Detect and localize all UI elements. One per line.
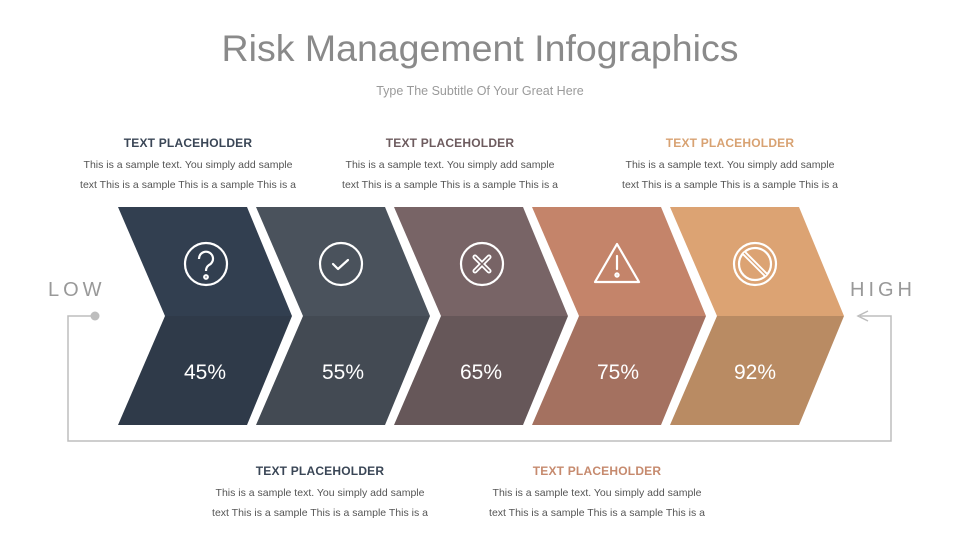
text block 3 bbox=[622, 136, 838, 191]
label high: HIGH bbox=[850, 279, 916, 301]
text block 5 bbox=[489, 464, 705, 519]
text block 2 bbox=[342, 136, 558, 191]
chevron 4: 75% bbox=[597, 361, 639, 384]
chevron 1 bbox=[118, 207, 292, 425]
subtitle: Type The Subtitle Of Your Great Here bbox=[376, 84, 584, 98]
loop arrow bbox=[68, 311, 891, 441]
icon: prohibited bbox=[734, 243, 776, 285]
chevron 2: 55% bbox=[322, 361, 364, 384]
text block 4: This is a sample text. You simply add sample bbox=[216, 487, 424, 499]
text block 2: TEXT PLACEHOLDER bbox=[386, 136, 514, 150]
chevron 1: 45% bbox=[184, 361, 226, 384]
icon: warning bbox=[595, 244, 639, 282]
text block 1: TEXT PLACEHOLDER bbox=[124, 136, 252, 150]
icon: cross bbox=[461, 243, 503, 285]
text block 5: This is a sample text. You simply add sample bbox=[493, 487, 701, 499]
text block 3: TEXT PLACEHOLDER bbox=[666, 136, 794, 150]
label low: LOW bbox=[48, 279, 106, 301]
text block 4: text This is a sample This is a sample This is a bbox=[212, 507, 428, 519]
text block 3: This is a sample text. You simply add sample bbox=[626, 159, 834, 171]
icon: check bbox=[320, 243, 362, 285]
title: Risk Management Infographics bbox=[222, 27, 738, 69]
chevron 3: 65% bbox=[460, 361, 502, 384]
text block 5: text This is a sample This is a sample This is a bbox=[489, 507, 705, 519]
text block 3: text This is a sample This is a sample This is a bbox=[622, 179, 838, 191]
chevron 5: 92% bbox=[734, 361, 776, 384]
text block 4: TEXT PLACEHOLDER bbox=[256, 464, 384, 478]
text block 2: This is a sample text. You simply add sample bbox=[346, 159, 554, 171]
text block 5: TEXT PLACEHOLDER bbox=[533, 464, 661, 478]
chevron 2 bbox=[256, 207, 430, 425]
text block 1: text This is a sample This is a sample This is a bbox=[80, 179, 296, 191]
text block 1: This is a sample text. You simply add sample bbox=[84, 159, 292, 171]
chevron 3 bbox=[394, 207, 568, 425]
chevron 4 bbox=[532, 207, 706, 425]
text block 1 bbox=[80, 136, 296, 191]
icon: question bbox=[185, 243, 227, 285]
text block 4 bbox=[212, 464, 428, 519]
text block 2: text This is a sample This is a sample This is a bbox=[342, 179, 558, 191]
chevron 5 bbox=[670, 207, 844, 425]
